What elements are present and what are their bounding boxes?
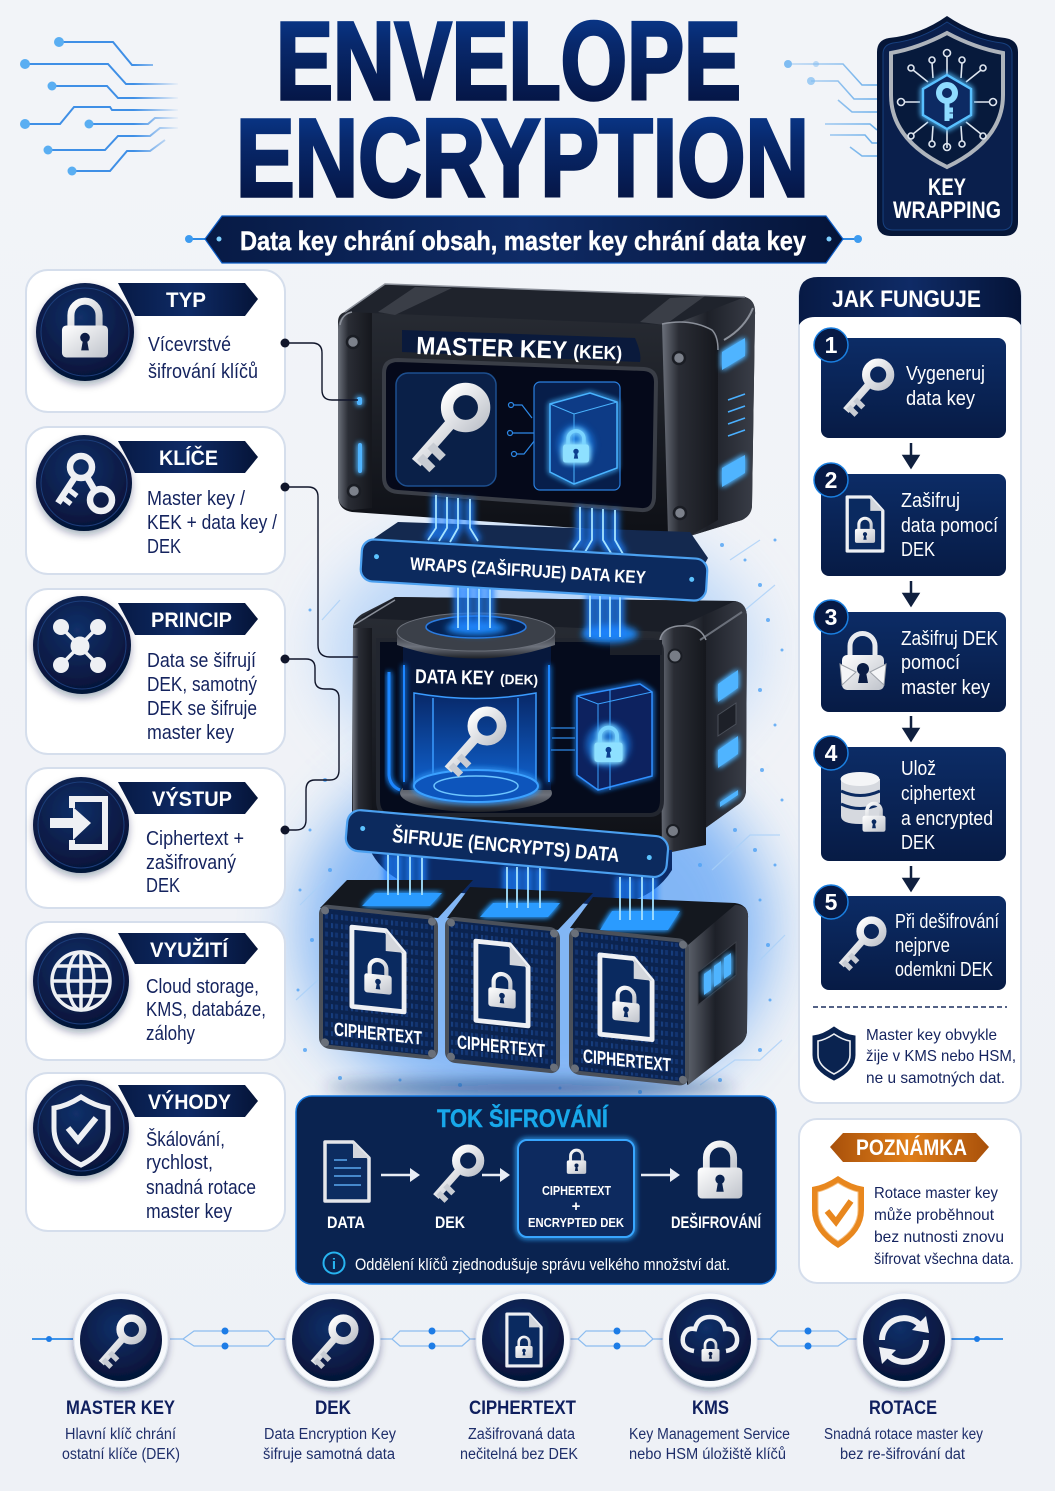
ciphertext block 1: [320, 880, 473, 1058]
screen: [384, 360, 656, 510]
panel: tok sifrovani: [296, 1096, 776, 1284]
arrow: [381, 1168, 420, 1182]
bar: wraps: [360, 539, 708, 601]
panel: vyhody: rychlost,: [146, 1152, 213, 1174]
item: rotace: ROTACE: [869, 1398, 937, 1419]
item: master key: [62, 1293, 180, 1463]
icon: exit: [33, 777, 129, 873]
panel: klice: [26, 427, 285, 574]
ciphertext box: [518, 1140, 634, 1237]
step 4: a encrypted: [901, 808, 993, 830]
label: master key: MASTER KEY: [416, 332, 568, 365]
circuit decoration left: [20, 37, 178, 176]
panel: vyuziti: zálohy: [146, 1023, 195, 1045]
item: master key: Hlavní klíč chrání: [65, 1426, 177, 1443]
item: rotace: [824, 1293, 983, 1463]
ciphertext block 2: [447, 887, 593, 1072]
panel: vystup: zašifrovaný: [146, 852, 236, 874]
ciphertext block 3: CIPHERTEXT: [583, 1046, 671, 1077]
icon: unlock: [698, 1144, 742, 1199]
arrow: [904, 581, 918, 605]
title: ENCRYPTION: [236, 97, 809, 220]
leds: [357, 338, 745, 487]
item: rotace: bez re-šifrování dat: [840, 1446, 966, 1463]
icon: database with lock: [840, 772, 886, 832]
note: kms: Master key obvykle: [866, 1027, 997, 1044]
panel: typ: [26, 270, 285, 412]
item: kms: Key Management Service: [629, 1426, 790, 1443]
background glow and particles: [296, 520, 785, 1120]
item: dek: šifruje samotná data: [263, 1446, 395, 1463]
panel: jak funguje: [799, 277, 1021, 1103]
step 4: [814, 736, 1006, 861]
item: ciphertext: nečitelná bez DEK: [460, 1446, 579, 1463]
icon: keys: [36, 435, 132, 531]
label backing: [402, 330, 640, 362]
step 3: master key: [901, 677, 990, 699]
item: ciphertext: [460, 1293, 579, 1463]
panel: vyhody: snadná rotace: [146, 1177, 256, 1199]
panel: poznamka: šifrovat všechna data.: [874, 1251, 1014, 1268]
badge: key wrapping: WRAPPING: [893, 197, 1001, 224]
beams: encrypts to ciphertext: [388, 853, 653, 920]
ribbon: klice: [118, 441, 258, 473]
step 2: DEK: [901, 539, 936, 561]
beams: master key to wraps: [428, 495, 623, 554]
panel: typ: Vícevrstvé: [148, 334, 231, 356]
info note: Oddělení klíčů zjednodušuje správu velkého množství dat.: [355, 1255, 730, 1274]
step 1: data key: [906, 388, 975, 410]
icon: network: [33, 596, 131, 694]
connector lines from cards to machine: [280, 338, 358, 834]
step 4: Ulož: [901, 758, 936, 780]
header: [799, 277, 1021, 325]
ribbon: poznamka: [830, 1133, 989, 1162]
machine: data key vault: [352, 597, 747, 852]
bar: encrypts: ŠIFRUJE (ENCRYPTS) DATA: [391, 823, 620, 867]
screen: [378, 640, 662, 815]
panel: poznamka: [799, 1119, 1021, 1283]
bar: wraps: WRAPS (ZAŠIFRUJE) DATA KEY: [410, 553, 646, 588]
beams: encrypts cores: [388, 853, 653, 920]
panel: princip: DEK se šifruje: [147, 698, 257, 720]
panel: vyhody: Škálování,: [146, 1128, 225, 1151]
panel: princip: Data se šifrují: [147, 650, 256, 672]
ciphertext box: CIPHERTEXT: [542, 1183, 611, 1198]
glowing lock cube: [550, 684, 652, 790]
panel: princip: [26, 589, 285, 754]
panel: vyuziti: KMS, databáze,: [146, 999, 266, 1021]
item: kms: [629, 1293, 790, 1463]
panel: klice: Master key /: [147, 488, 245, 510]
icon: orange shield: [812, 1176, 864, 1248]
panel: klice: KEK + data key /: [147, 512, 277, 534]
machine: master key vault: (KEK): [573, 342, 622, 365]
panel: vystup: DEK: [146, 875, 181, 897]
note: kms: [813, 1027, 1016, 1087]
panel: tok sifrovani: DATA: [327, 1213, 365, 1232]
key panel: [396, 373, 496, 486]
step 2: [814, 463, 1006, 576]
panel: tok sifrovani: TOK ŠIFROVÁNÍ: [437, 1103, 609, 1133]
item: rotace: Snadná rotace master key: [824, 1426, 983, 1443]
subtitle banner: [185, 216, 862, 263]
machine: master key vault: [338, 284, 755, 536]
vault underside: [370, 850, 672, 905]
header: JAK FUNGUJE: [832, 286, 981, 313]
step 2: data pomocí: [901, 515, 998, 537]
step 5: odemkni DEK: [895, 959, 994, 981]
wraps bar top face: [364, 522, 708, 590]
icon: document: [325, 1142, 369, 1201]
step 2: Zašifruj: [901, 490, 960, 512]
icon: lock: [36, 283, 134, 381]
item: dek: [263, 1293, 396, 1463]
step 2: 2: [825, 467, 837, 493]
ribbon: typ: [118, 283, 258, 316]
icon: shield with key: [891, 33, 1003, 167]
arrow: [904, 866, 918, 890]
item: kms: KMS: [692, 1398, 729, 1419]
ribbon: vystup: [118, 782, 258, 814]
panel: poznamka: Rotace master key: [874, 1185, 998, 1202]
beams: wraps to data key: [458, 583, 620, 637]
metal cap: [662, 322, 718, 536]
title: [236, 0, 809, 220]
ciphertext box: ENCRYPTED DEK: [528, 1215, 625, 1230]
item: master key: MASTER KEY: [66, 1398, 175, 1419]
arrow: [482, 1168, 510, 1182]
title: ENVELOPE: [276, 0, 741, 123]
panel: princip: master key: [147, 722, 234, 744]
subtitle banner: Data key chrání obsah, master key chrání data key: [240, 226, 806, 256]
icon: shield check: [33, 1080, 129, 1176]
item: dek: Data Encryption Key: [264, 1426, 396, 1443]
ribbon: typ: TYP: [166, 289, 206, 312]
panel: poznamka: může proběhnout: [874, 1206, 995, 1224]
badge: key wrapping: [877, 16, 1018, 236]
step 4: 4: [825, 740, 838, 766]
ciphertext block 2: CIPHERTEXT: [457, 1032, 545, 1063]
icon: globe: [33, 933, 129, 1029]
step 5: nejprve: [895, 935, 950, 957]
machine: data key vault: (DEK): [500, 671, 538, 688]
step 1: Vygeneruj: [906, 363, 985, 385]
item: ciphertext: CIPHERTEXT: [469, 1398, 576, 1419]
data key cylinder: [389, 613, 555, 812]
ribbon: vyuziti: [118, 933, 258, 964]
step 3: [814, 600, 1006, 712]
ribbon: poznamka: POZNÁMKA: [856, 1135, 967, 1160]
info note: i: [332, 1256, 336, 1273]
step 4: DEK: [901, 832, 936, 854]
note: kms: žije v KMS nebo HSM,: [866, 1048, 1016, 1065]
icon: wrapped lock: [840, 634, 886, 690]
metal cap: [660, 626, 706, 852]
icon: dek key: [436, 1149, 480, 1201]
ribbon: princip: [118, 603, 258, 635]
arrow: [904, 716, 918, 740]
step 5: [814, 885, 1006, 990]
badge: key wrapping: KEY: [928, 174, 966, 201]
panel: vyhody: master key: [146, 1201, 232, 1223]
panel: princip: DEK, samotný: [147, 674, 257, 696]
label: data key: DATA KEY: [415, 666, 495, 690]
ciphertext block 3: [570, 897, 748, 1085]
panel: klice: DEK: [147, 536, 182, 558]
panel: vyhody: [26, 1073, 285, 1231]
panel: vyuziti: Cloud storage,: [146, 976, 259, 998]
bar: encrypts: [345, 809, 669, 878]
ciphertext block 1: CIPHERTEXT: [334, 1019, 422, 1050]
ribbon: vystup: VÝSTUP: [152, 787, 232, 811]
step 1: 1: [825, 332, 838, 358]
circuit lines: [508, 402, 535, 456]
ribbon: vyhody: [118, 1085, 258, 1117]
arrow: [641, 1168, 680, 1182]
panel: vystup: [26, 768, 285, 908]
ribbon: princip: PRINCIP: [151, 609, 232, 632]
circuit decoration right: [784, 60, 877, 156]
step 1: [814, 328, 1006, 438]
step 5: Při dešifrování: [895, 911, 999, 933]
step 5: 5: [825, 889, 838, 915]
panel: vystup: Ciphertext +: [146, 828, 244, 850]
item: master key: ostatní klíče (DEK): [62, 1446, 180, 1463]
step 4: ciphertext: [901, 783, 975, 805]
step 3: Zašifruj DEK: [901, 628, 999, 650]
note: kms: ne u samotných dat.: [866, 1070, 1005, 1087]
arrow: [904, 443, 918, 467]
vault lights: [718, 670, 738, 807]
ribbon: vyuziti: VYUŽITÍ: [150, 938, 229, 962]
panel: poznamka: bez nutnosti znovu: [874, 1229, 1004, 1246]
glowing lock cube: [534, 382, 620, 490]
item: dek: DEK: [315, 1398, 351, 1419]
bottom connectors: [32, 1328, 1003, 1350]
item: ciphertext: Zašifrovaná data: [468, 1426, 575, 1443]
bolts: [347, 336, 686, 519]
ribbon: vyhody: VÝHODY: [148, 1090, 231, 1114]
panel: tok sifrovani: DEŠIFROVÁNÍ: [671, 1213, 762, 1232]
ciphertext box: +: [572, 1198, 581, 1215]
step 3: 3: [825, 604, 837, 630]
step 3: pomocí: [901, 652, 960, 674]
ribbon: klice: KLÍČE: [159, 446, 218, 470]
panel: tok sifrovani: DEK: [435, 1213, 466, 1232]
panel: typ: šifrování klíčů: [148, 361, 258, 383]
panel: vyuziti: [26, 922, 285, 1060]
item: kms: nebo HSM úložiště klíčů: [629, 1446, 786, 1463]
